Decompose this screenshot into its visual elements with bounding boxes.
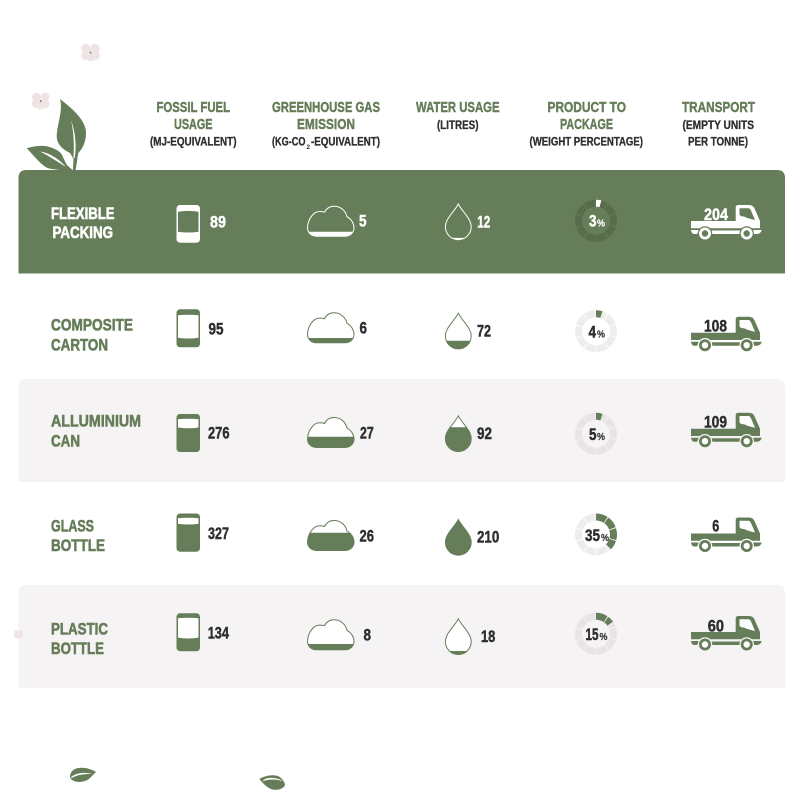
heading: water usage: WATER USAGE [416,100,500,116]
icon: truck with value [691,205,762,241]
band: alluminium can [18,379,785,482]
donut: 15%: 15 [586,626,598,644]
row label: FLEXIBLE [51,204,114,223]
icon: can [176,514,200,552]
heading: greenhouse gas emission: EMISSION [297,117,355,133]
icon: plant leaves [27,99,86,171]
heading: greenhouse gas emission [272,100,380,151]
heading: transport: (EMPTY UNITS [682,120,754,132]
value: 210 [477,528,499,546]
value: 134 [208,624,230,642]
icon: can [176,613,200,651]
value: 95 [208,320,224,338]
value: 327 [208,525,229,543]
icon: truck with value [691,518,762,553]
row label [51,517,105,555]
icon: truck with value: 108 [704,317,727,335]
icon: can [176,414,200,452]
row label: CARTON [51,336,108,355]
value: 26 [360,528,374,546]
band: plastic bottle [18,585,785,688]
row label: PLASTIC [51,619,108,638]
icon: cloud [308,418,354,448]
heading: greenhouse gas emission: -EQUIVALENT) [311,136,380,148]
icon: falling leaf right [259,775,285,790]
row: composite carton [51,309,762,355]
row: flexible packing [51,203,762,243]
icon: truck with value [691,616,762,652]
heading: water usage [416,100,500,132]
donut: 35% [578,517,614,552]
heading: greenhouse gas emission: GREENHOUSE GAS [272,100,380,116]
icon: falling leaf left [70,768,96,782]
heading: transport: PER TONNE) [688,136,748,148]
heading: product to package [530,100,643,148]
row label [51,204,114,242]
donut: 5%: % [597,432,605,443]
flower: small at plastic row [14,630,23,639]
icon: truck with value: 60 [708,618,724,636]
icon: cloud [308,520,354,550]
row label: PACKING [52,223,113,242]
donut: 15%: % [600,632,608,643]
icon: truck with value [691,413,762,448]
row label: BOTTLE [51,536,105,555]
icon: truck with value [691,317,762,352]
icon: truck with value: 109 [704,414,727,432]
icon: truck with value: 6 [712,518,719,536]
heading: fossil fuel usage [150,100,237,148]
icon: cloud [308,313,354,343]
donut: 3%: % [597,219,605,230]
band: flexible packing [18,170,785,274]
icon: drop [445,313,471,349]
row label: ALLUMINIUM [51,412,141,431]
icon: cloud [308,620,354,650]
heading: transport [682,100,755,148]
donut: 3%: 3 [589,213,596,231]
value: 12 [477,213,490,231]
donut: 4%: 4 [588,324,597,342]
value: 6 [360,319,367,337]
value: 8 [364,627,371,645]
value: 89 [210,213,226,231]
donut: 4% [578,314,614,349]
icon: drop [445,619,471,654]
column headings [150,100,755,151]
heading: fossil fuel usage: FOSSIL FUEL [156,100,230,116]
heading: greenhouse gas emission: 2 [306,145,311,151]
value: 5 [359,213,366,231]
row label [51,619,108,658]
donut: 35%: 35 [585,527,600,545]
value: 27 [360,424,374,442]
heading: product to package: (WEIGHT PERCENTAGE) [530,136,643,148]
donut: 5% [578,416,614,451]
heading: product to package: PACKAGE [560,117,613,133]
heading: transport: TRANSPORT [682,100,755,116]
icon: drop [445,416,471,451]
donut: 35%: % [601,533,609,544]
row: plastic bottle [51,613,762,658]
icon: cloud [308,206,354,236]
value: 276 [208,425,230,443]
row: alluminium can [51,412,762,452]
heading: fossil fuel usage: USAGE [174,117,213,133]
row label [51,412,141,451]
value: 92 [477,425,492,443]
flower: top [81,44,100,61]
heading: greenhouse gas emission: (KG-CO [272,136,306,148]
icon: drop [445,520,471,555]
row: glass bottle [51,514,762,555]
heading: product to package: PRODUCT TO [548,100,626,116]
icon: can [176,205,200,243]
row label: CAN [51,432,80,451]
donut: 15% [578,616,614,651]
icon: drop [445,204,471,240]
heading: water usage: (LITRES) [437,120,479,132]
donut: 5%: 5 [589,426,596,444]
row label: GLASS [51,517,94,536]
row label [51,316,133,355]
icon: can [176,309,200,347]
row label: BOTTLE [51,639,104,658]
donut: 3% [578,203,614,238]
value: 72 [477,323,491,341]
icon: truck with value: 204 [704,206,729,224]
flower: beside leaves [32,93,50,109]
value: 18 [481,628,495,646]
heading: fossil fuel usage: (MJ-EQUIVALENT) [150,136,237,148]
donut: 4%: % [597,330,605,341]
row label: COMPOSITE [51,316,133,335]
